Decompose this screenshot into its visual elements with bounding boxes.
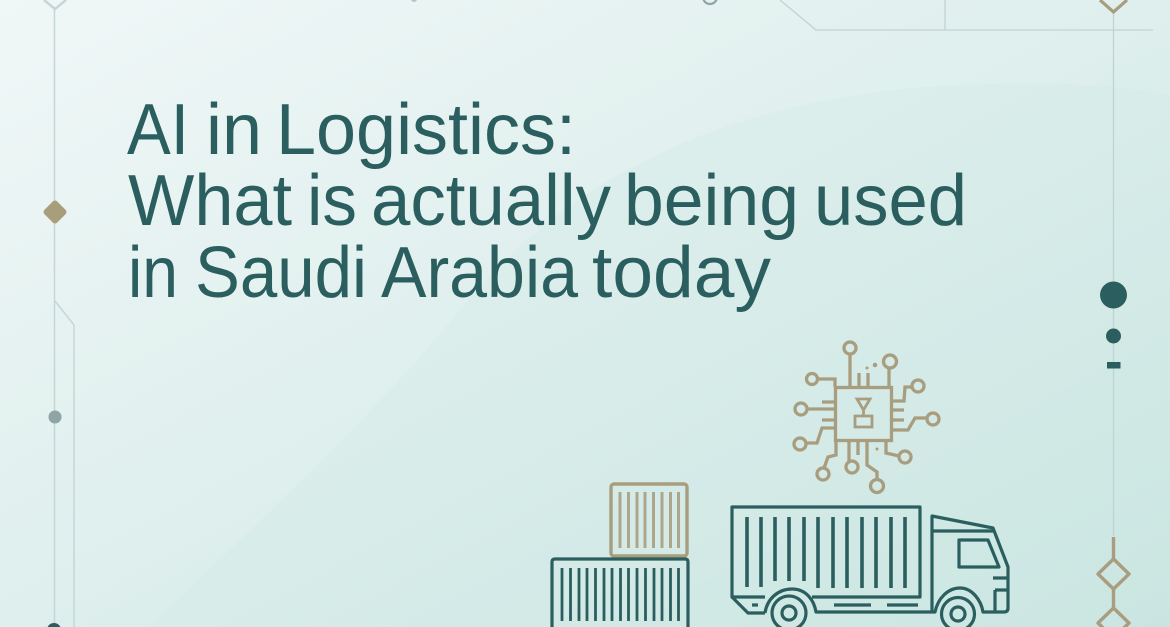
title: is [307, 161, 357, 241]
chip body [836, 388, 892, 440]
title: Arabia [381, 233, 579, 313]
icon: AI chip [794, 342, 939, 492]
circuit lines: top right [780, 0, 1153, 536]
title: in [128, 233, 178, 313]
title: being [624, 161, 799, 241]
node: gold filled diamond [42, 199, 68, 225]
chip bottom pins [824, 441, 899, 480]
node: bottom left dot [47, 623, 61, 627]
circuit lines: left [54, 8, 74, 627]
title: Saudi [195, 233, 367, 313]
title: used [814, 161, 967, 241]
node: top ring [703, 0, 717, 4]
title: in [206, 90, 262, 170]
chip top pins [850, 353, 889, 387]
truck cab roof line [932, 529, 995, 533]
background soft wave shape [150, 83, 1170, 627]
truck front details [993, 578, 1008, 612]
node chain: bottom right diamonds [1098, 537, 1129, 627]
truck chassis and wheel arches [765, 516, 1008, 613]
title: AI [127, 90, 189, 170]
truck cargo slats [747, 517, 905, 588]
chip small dots [873, 363, 877, 367]
truck window [959, 540, 999, 567]
truck cargo box [732, 507, 920, 597]
truck underbody dashes [834, 603, 918, 607]
icon: gold container [611, 484, 687, 556]
node: top right diamond [1100, 0, 1127, 12]
node: right dash [1107, 362, 1120, 368]
node: top left diamond [44, 0, 66, 9]
title: actually [371, 161, 611, 241]
chip right pins [892, 387, 927, 430]
icon: teal container [552, 559, 688, 627]
icon: truck [732, 507, 1008, 627]
chip centre symbol [855, 399, 872, 427]
chip left pins [807, 379, 835, 443]
title [127, 90, 967, 313]
title: Logistics: [276, 90, 576, 170]
title: today [592, 233, 771, 313]
truck wheels [772, 596, 806, 627]
node: right small dot [1106, 328, 1121, 344]
title: What [128, 161, 292, 241]
node: right large dot [1100, 282, 1127, 308]
node: grey dot [48, 410, 62, 424]
node: small top dot [411, 0, 417, 2]
